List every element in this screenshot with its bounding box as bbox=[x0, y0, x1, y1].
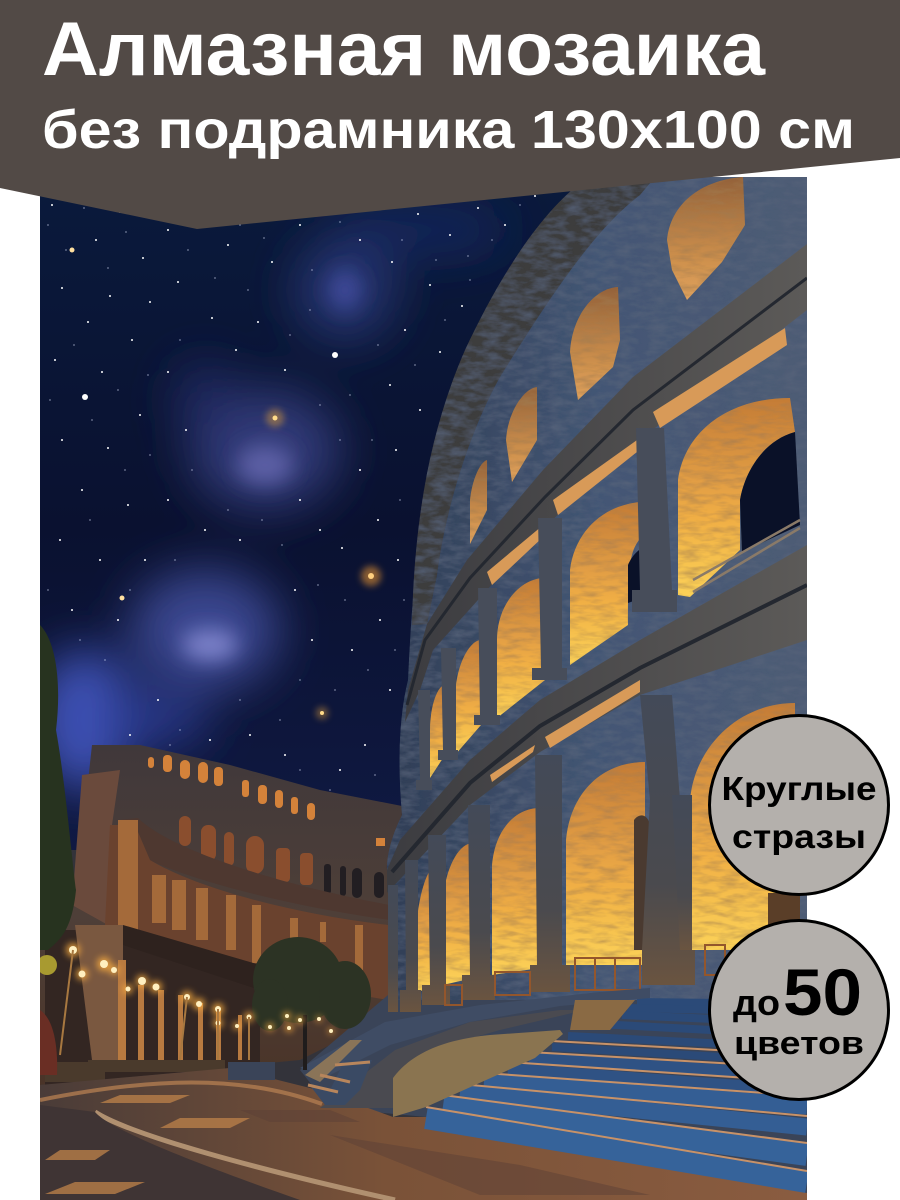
badge: up to 50 colours: цветов bbox=[734, 1025, 864, 1061]
street lamps bbox=[60, 943, 334, 1080]
tree: left edge bbox=[37, 625, 76, 975]
stairs bbox=[426, 1002, 807, 1182]
ground arcade bbox=[45, 930, 260, 1085]
brick tower bbox=[72, 770, 120, 925]
upper arcade lights bbox=[148, 755, 385, 846]
badge: up to 50 colours bbox=[710, 920, 888, 1100]
ornate top rim bbox=[412, 177, 655, 625]
mid-level orange arcade bbox=[105, 825, 388, 1000]
lattice railing at arch bases bbox=[445, 945, 725, 1005]
lower cornice bbox=[387, 545, 807, 893]
curved cornice bbox=[118, 818, 390, 920]
pillars middle row bbox=[416, 428, 677, 790]
railing bbox=[693, 520, 800, 592]
middle arcade bbox=[179, 816, 313, 885]
bright stars bbox=[70, 248, 381, 719]
badge: up to 50 colours: 50 bbox=[783, 955, 862, 1029]
fence bbox=[45, 1060, 225, 1082]
base behind ramps and stairs bbox=[300, 985, 807, 1195]
stone wall bbox=[387, 177, 807, 1000]
top row arches bbox=[470, 177, 745, 544]
lit ledges bbox=[487, 328, 787, 782]
title: Алмазная мозаика bbox=[42, 7, 766, 92]
bottom row arches bbox=[416, 703, 795, 992]
badge: up to 50 colours: до bbox=[733, 982, 780, 1023]
night sky bbox=[40, 191, 571, 850]
dark balcony bbox=[123, 925, 256, 988]
stars bbox=[50, 192, 535, 770]
nebula highlights bbox=[182, 270, 361, 661]
badge: round rhinestones bbox=[710, 716, 888, 894]
header banner bbox=[0, 0, 900, 229]
ground: cobblestone road bbox=[40, 1068, 807, 1200]
nebula clouds bbox=[35, 205, 510, 790]
tree: centre bbox=[252, 937, 371, 1070]
sky through arches bbox=[628, 432, 800, 603]
subtitle: без подрамника 130х100 см bbox=[42, 100, 855, 160]
badge: round rhinestones: Круглые bbox=[722, 770, 876, 807]
dark inner passage bbox=[634, 815, 650, 950]
badge: round rhinestones: стразы bbox=[732, 818, 866, 855]
middle row arches bbox=[430, 398, 795, 778]
foreground colosseum bbox=[387, 177, 807, 1012]
pillars bottom row bbox=[388, 695, 695, 1012]
photo: Colosseum at night bbox=[35, 177, 807, 1200]
photo base fill bbox=[40, 850, 426, 1117]
upper cornice bbox=[405, 244, 807, 722]
background colosseum bbox=[40, 745, 402, 1085]
stone ramps bbox=[300, 988, 650, 1117]
